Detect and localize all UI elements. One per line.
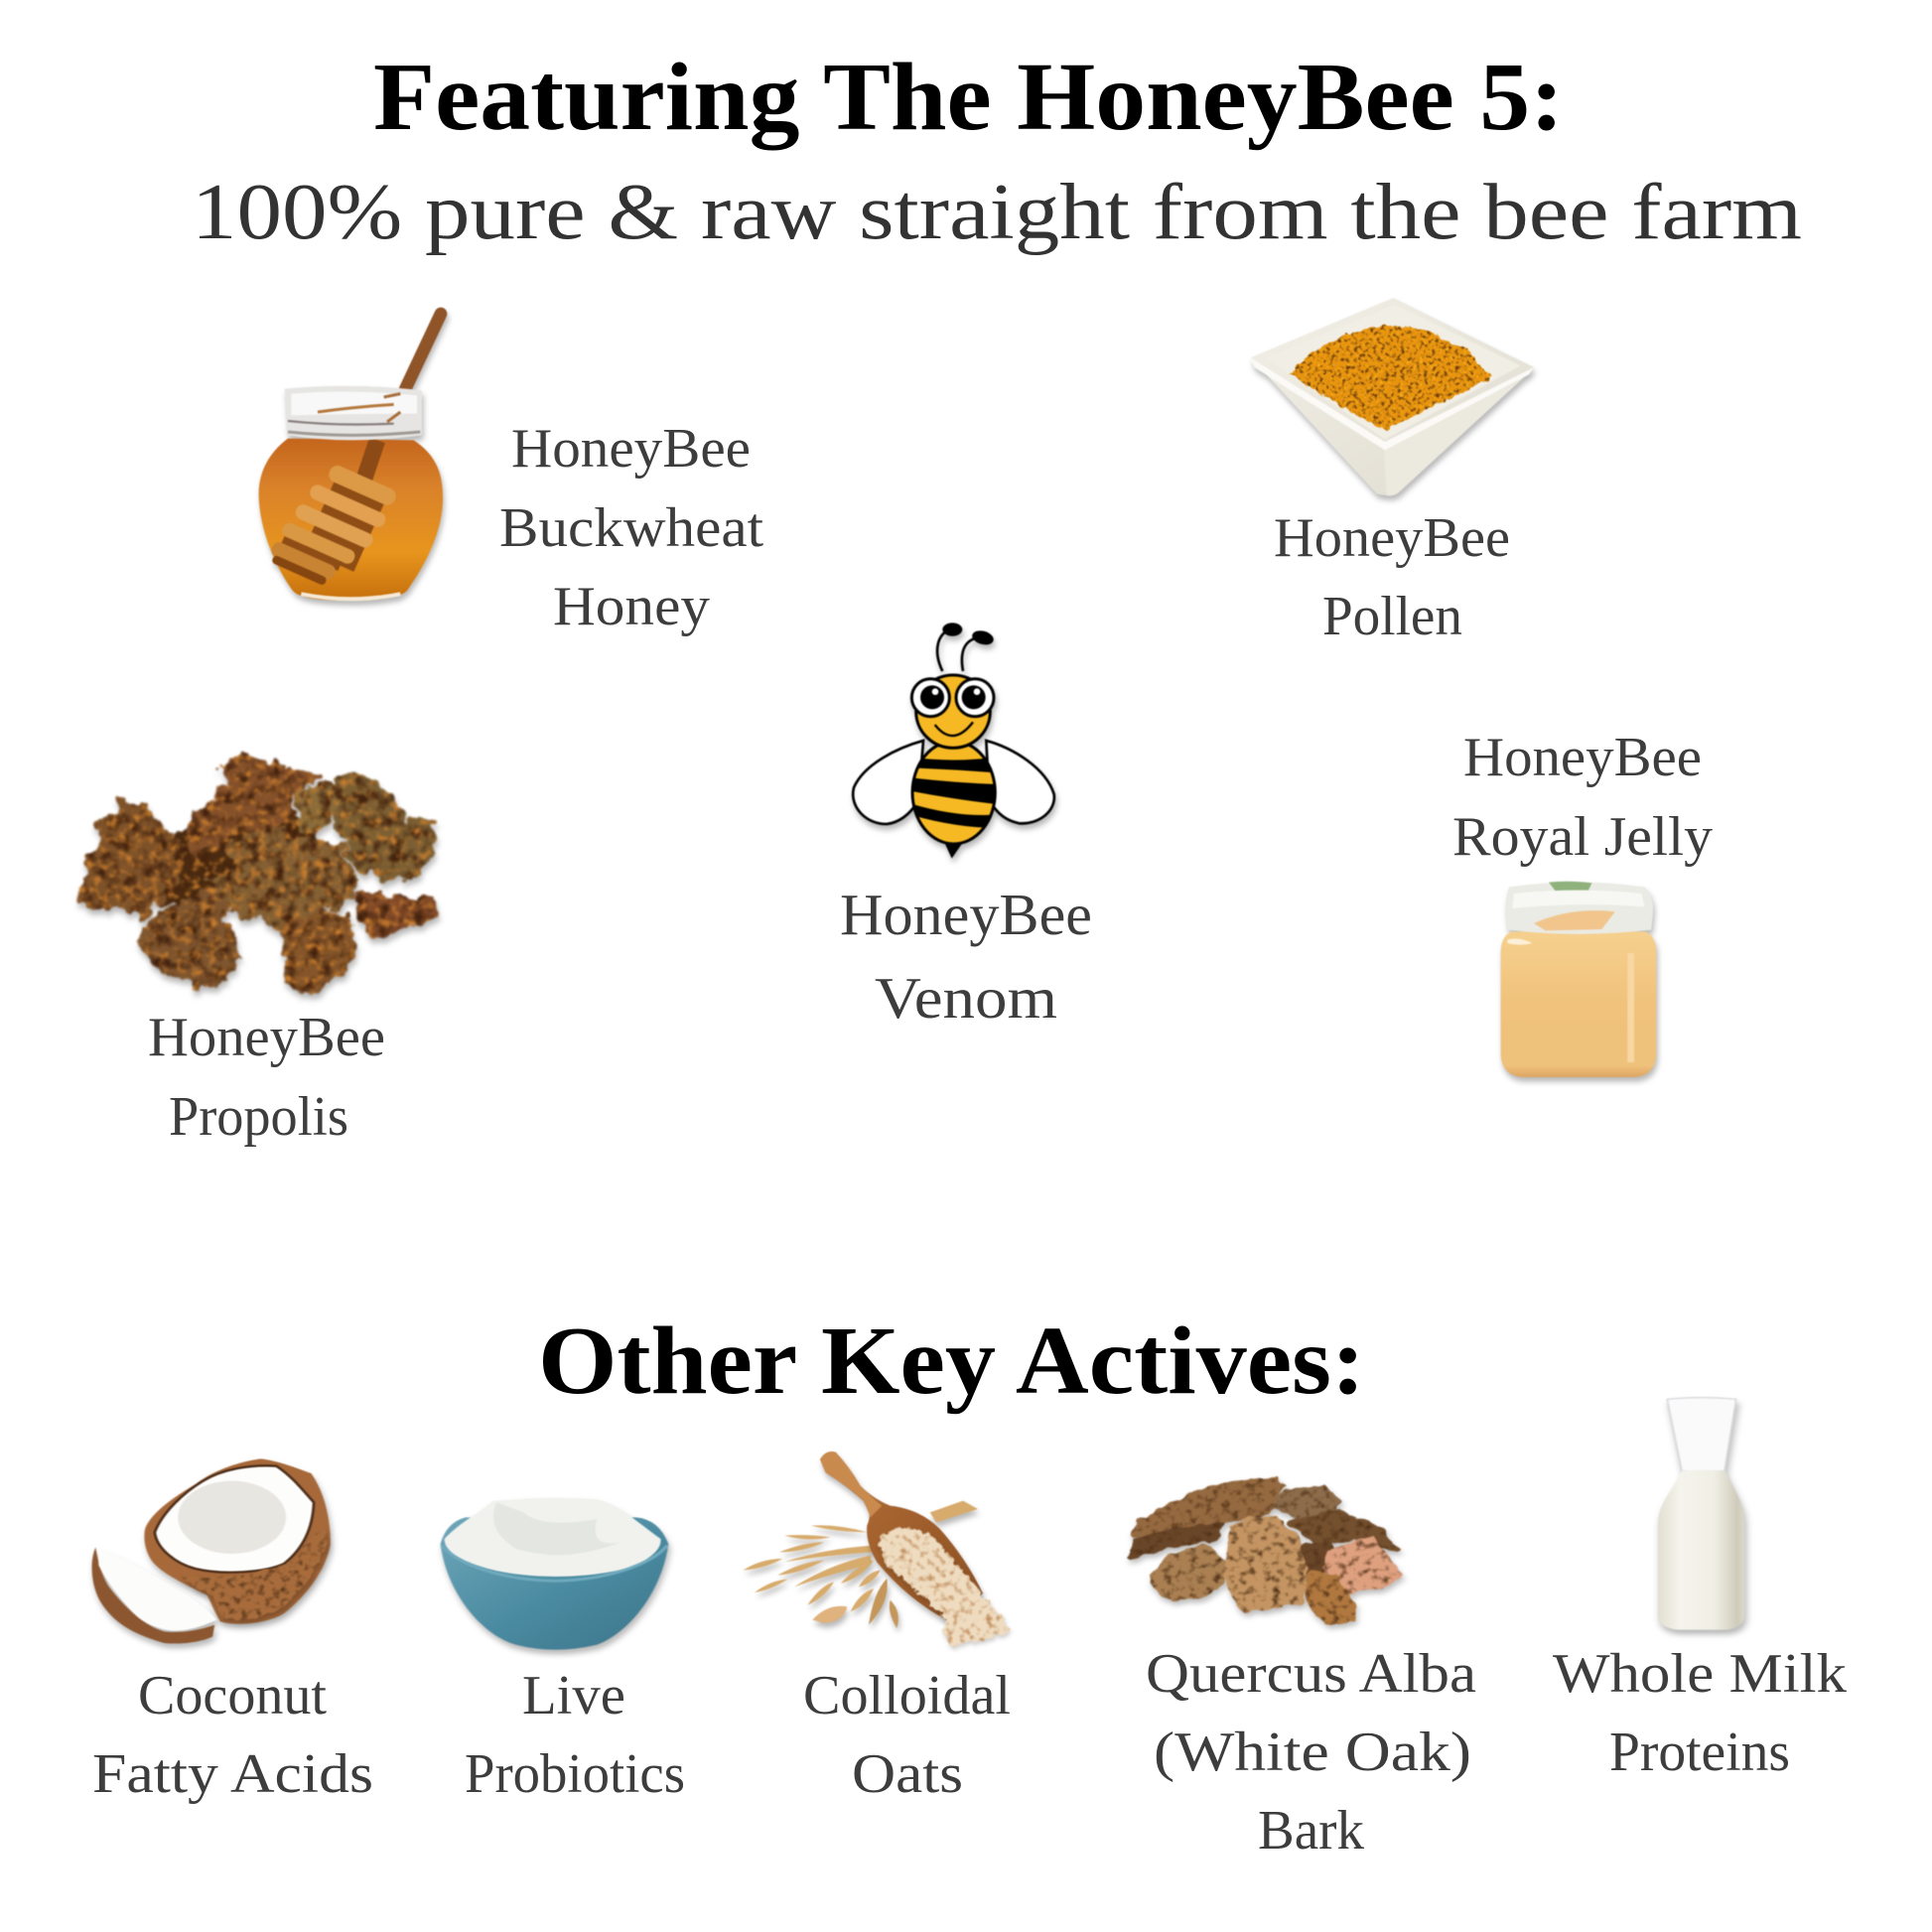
bowl shape — [1251, 298, 1534, 495]
smile — [935, 722, 973, 736]
icon: honey jar — [259, 314, 443, 601]
label: HoneyBee Venom: Venom — [875, 965, 1057, 1031]
stinger — [944, 841, 964, 859]
head — [916, 675, 990, 748]
icon: pollen bowl — [1251, 298, 1534, 495]
label: HoneyBee Venom — [840, 882, 1092, 1031]
body — [910, 742, 996, 844]
coconut wedge — [92, 1547, 216, 1643]
label: Whole Milk Proteins: Proteins — [1609, 1722, 1790, 1783]
icon: oak bark — [1128, 1477, 1402, 1623]
label: HoneyBee Pollen: Pollen — [1322, 586, 1462, 647]
antennae — [937, 622, 995, 671]
oat stalks — [743, 1501, 978, 1628]
label: HoneyBee Royal Jelly: HoneyBee — [1463, 727, 1702, 788]
label: Colloidal Oats: Oats — [852, 1743, 963, 1805]
label: HoneyBee Royal Jelly — [1452, 727, 1713, 868]
label: HoneyBee Pollen: HoneyBee — [1274, 507, 1510, 569]
coconut half — [144, 1458, 331, 1624]
label: HoneyBee Buckwheat Honey: Buckwheat — [499, 497, 763, 559]
label: HoneyBee Propolis: HoneyBee — [148, 1007, 385, 1068]
label: Live Probiotics — [465, 1665, 685, 1805]
label: Quercus Alba (White Oak) Bark — [1146, 1643, 1476, 1862]
coconut shell texture — [180, 1526, 327, 1621]
subtitle: 100% pure & raw straight from the bee farm — [192, 169, 1802, 256]
title: Featuring The HoneyBee 5: Featuring The HoneyBee 5: — [373, 44, 1564, 151]
scoop — [820, 1451, 983, 1620]
eyes — [911, 679, 994, 717]
icon: yogurt bowl — [441, 1498, 668, 1650]
icon: coconut — [92, 1458, 331, 1643]
icon: milk bottle — [1658, 1398, 1744, 1630]
label: HoneyBee Propolis — [148, 1007, 385, 1148]
label: Whole Milk Proteins: Whole Milk — [1553, 1643, 1847, 1705]
label: Coconut Fatty Acids — [92, 1665, 373, 1805]
label: Quercus Alba (White Oak) Bark: Bark — [1258, 1800, 1364, 1862]
label: Whole Milk Proteins — [1553, 1643, 1847, 1783]
pollen grains — [1291, 326, 1492, 430]
label: HoneyBee Pollen — [1274, 507, 1510, 647]
label: HoneyBee Venom: HoneyBee — [840, 882, 1092, 947]
label: HoneyBee Royal Jelly: Royal Jelly — [1452, 806, 1713, 868]
label: HoneyBee Buckwheat Honey — [499, 418, 763, 637]
label: Colloidal Oats: Colloidal — [803, 1665, 1011, 1726]
label: Quercus Alba (White Oak) Bark: (White Oak) — [1154, 1722, 1471, 1783]
rolled oats — [879, 1526, 1011, 1646]
label: Live Probiotics: Live — [522, 1665, 625, 1726]
label: Coconut Fatty Acids: Coconut — [138, 1665, 327, 1726]
label: Live Probiotics: Probiotics — [465, 1743, 685, 1805]
label: Colloidal Oats — [803, 1665, 1011, 1805]
wings — [853, 741, 1054, 824]
label: Quercus Alba (White Oak) Bark: Quercus Alba — [1146, 1643, 1476, 1705]
icon: bee — [853, 622, 1054, 859]
icon: oats and wooden scoop — [743, 1451, 1011, 1646]
label: Coconut Fatty Acids: Fatty Acids — [92, 1743, 373, 1805]
icon: royal jelly jar — [1501, 882, 1656, 1077]
icon: propolis chunks — [81, 757, 435, 991]
label: HoneyBee Propolis: Propolis — [169, 1086, 348, 1148]
label: HoneyBee Buckwheat Honey: Honey — [553, 576, 710, 637]
label: HoneyBee Buckwheat Honey: HoneyBee — [511, 418, 751, 480]
heading: Other Key Actives: Other Key Actives: — [538, 1308, 1365, 1415]
